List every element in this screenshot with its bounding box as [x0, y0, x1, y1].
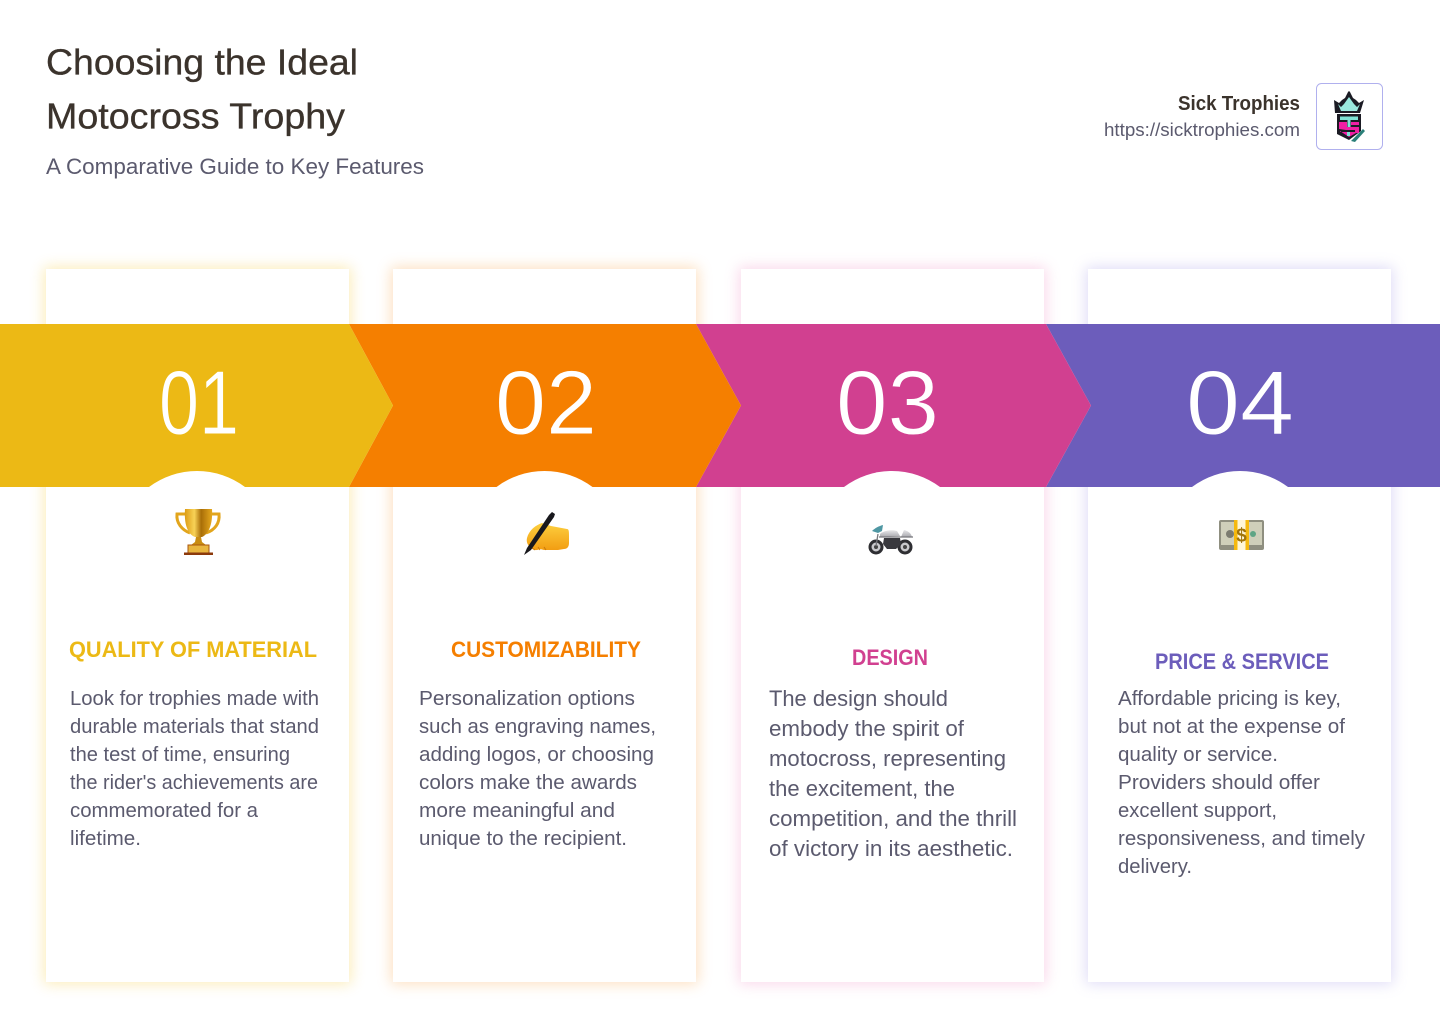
title: Motocross Trophy: [46, 96, 346, 136]
arrow: step 03: [696, 324, 1091, 487]
logo: [1316, 84, 1382, 150]
subtitle: A Comparative Guide to Key Features: [46, 154, 424, 179]
text block: responsiveness, and timely: [1118, 827, 1366, 850]
arrow: step 04: [1046, 324, 1440, 487]
panel: price and service: [1086, 267, 1393, 984]
text block: adding logos, or choosing: [419, 743, 654, 766]
text block: Affordable pricing is key,: [1118, 687, 1341, 710]
text block: embody the spirit of: [769, 716, 965, 741]
text block: more meaningful and: [419, 799, 615, 822]
icon: trophy: [177, 509, 219, 555]
panel: design: [739, 267, 1046, 984]
text block: [70, 687, 319, 850]
text block: of victory in its aesthetic.: [769, 836, 1013, 861]
chevron ribbon: [0, 324, 1440, 487]
text block: [419, 687, 656, 850]
text block: [769, 686, 1017, 861]
card background: [44, 267, 351, 984]
text block: unique to the recipient.: [419, 827, 627, 850]
arrow: step 01: 01: [159, 353, 239, 454]
text block: competition, and the thrill: [769, 806, 1017, 831]
text block: colors make the awards: [419, 771, 637, 794]
card background: [1086, 267, 1393, 984]
card background: [739, 267, 1046, 984]
text block: Personalization options: [419, 687, 635, 710]
panel: customizability: [391, 267, 698, 984]
arrow: step 01: [0, 324, 393, 487]
icon notches: [149, 471, 1288, 487]
arrow: step 04: 04: [1186, 353, 1294, 454]
panel: quality of material: [44, 267, 351, 984]
text block: excellent support,: [1118, 799, 1277, 822]
text block: motocross, representing: [769, 746, 1006, 771]
arrow: step 03: 03: [836, 353, 939, 454]
brand block: [1104, 84, 1382, 150]
icon: writing hand: [524, 512, 569, 555]
card background: [391, 267, 698, 984]
text block: the excitement, the: [769, 776, 955, 801]
title: [46, 42, 358, 136]
text block: but not at the expense of: [1118, 715, 1345, 738]
text block: Look for trophies made with: [70, 687, 319, 710]
heading: DESIGN: [852, 645, 928, 670]
arrow: step 02: 02: [495, 353, 597, 454]
text block: durable materials that stand: [70, 715, 319, 738]
text block: the rider's achievements are: [70, 771, 318, 794]
text block: the test of time, ensuring: [70, 743, 290, 766]
text block: [1118, 687, 1366, 878]
heading: QUALITY OF MATERIAL: [69, 637, 317, 662]
brand url: https://sicktrophies.com: [1104, 120, 1300, 140]
text block: such as engraving names,: [419, 715, 656, 738]
icon: money: $: [1236, 526, 1247, 546]
text block: quality or service.: [1118, 743, 1278, 766]
text block: delivery.: [1118, 855, 1192, 878]
text block: The design should: [769, 686, 948, 711]
icon: money: [1219, 520, 1264, 550]
arrow: step 02: [349, 324, 741, 487]
heading block: [46, 42, 424, 179]
text block: lifetime.: [70, 827, 141, 850]
text block: Providers should offer: [1118, 771, 1320, 794]
brand name: Sick Trophies: [1178, 93, 1300, 115]
text block: commemorated for a: [70, 799, 259, 822]
heading: CUSTOMIZABILITY: [451, 637, 641, 662]
heading: PRICE & SERVICE: [1155, 649, 1329, 674]
title: Choosing the Ideal: [46, 42, 358, 82]
icon: motorcycle: [870, 525, 913, 553]
